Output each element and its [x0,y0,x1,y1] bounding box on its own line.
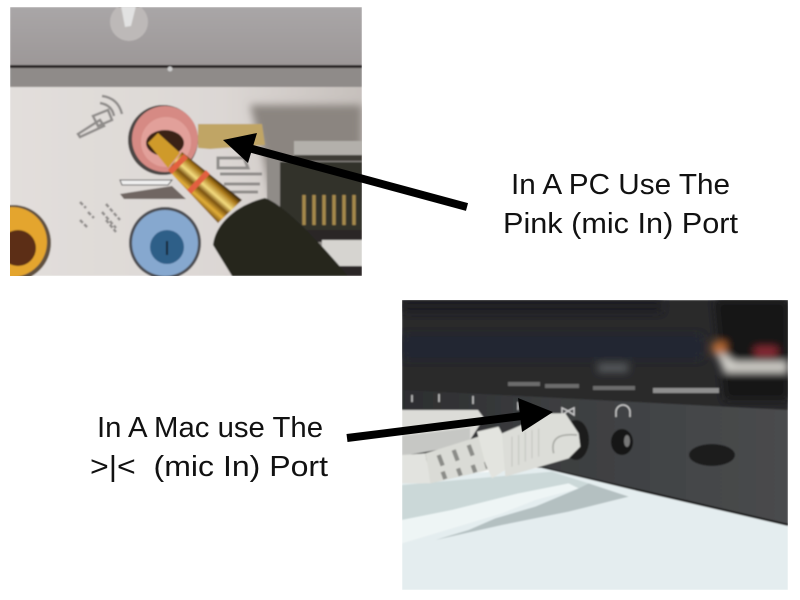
gold pin behind port [198,124,265,149]
caption: Mac instruction: >|< (mic In) Port [90,451,328,483]
port icons [412,394,630,417]
photo: PC rear audio ports with gold plug [0,3,362,281]
shadow behind connector [250,105,362,200]
blue line in port [129,207,201,279]
network connector [267,141,362,276]
groove and band [10,65,362,87]
embossed jack icons [78,96,262,232]
caption: PC instruction: Pink (mic In) Port [503,208,738,240]
black plug boot [213,198,348,276]
caption: Mac instruction [90,412,328,483]
key edge highlights [508,382,719,393]
metal case top [10,7,362,67]
chrome slots [120,180,172,185]
io panel [10,87,362,276]
desk surface [402,468,788,590]
screw [110,3,148,41]
headphone jack [611,429,633,455]
oval slot [689,444,735,466]
arrow: points to Mac mic port [347,398,553,438]
gold plug [148,133,242,223]
pink mic port [128,105,198,175]
desk shadows [402,472,589,520]
caption: PC instruction: In A PC Use The [511,169,730,201]
second plug behind [402,408,484,440]
blurred dark background [402,300,788,420]
photo: Mac laptop side ports with white plug [402,300,788,590]
orange port [10,204,52,276]
mic socket shadow [570,420,590,460]
white plug and cable [402,413,580,483]
caption: PC instruction [503,169,738,240]
laptop side edge [402,390,788,525]
caption: Mac instruction: In A Mac use The [97,412,323,444]
arrow: points to pink mic port [223,133,467,207]
